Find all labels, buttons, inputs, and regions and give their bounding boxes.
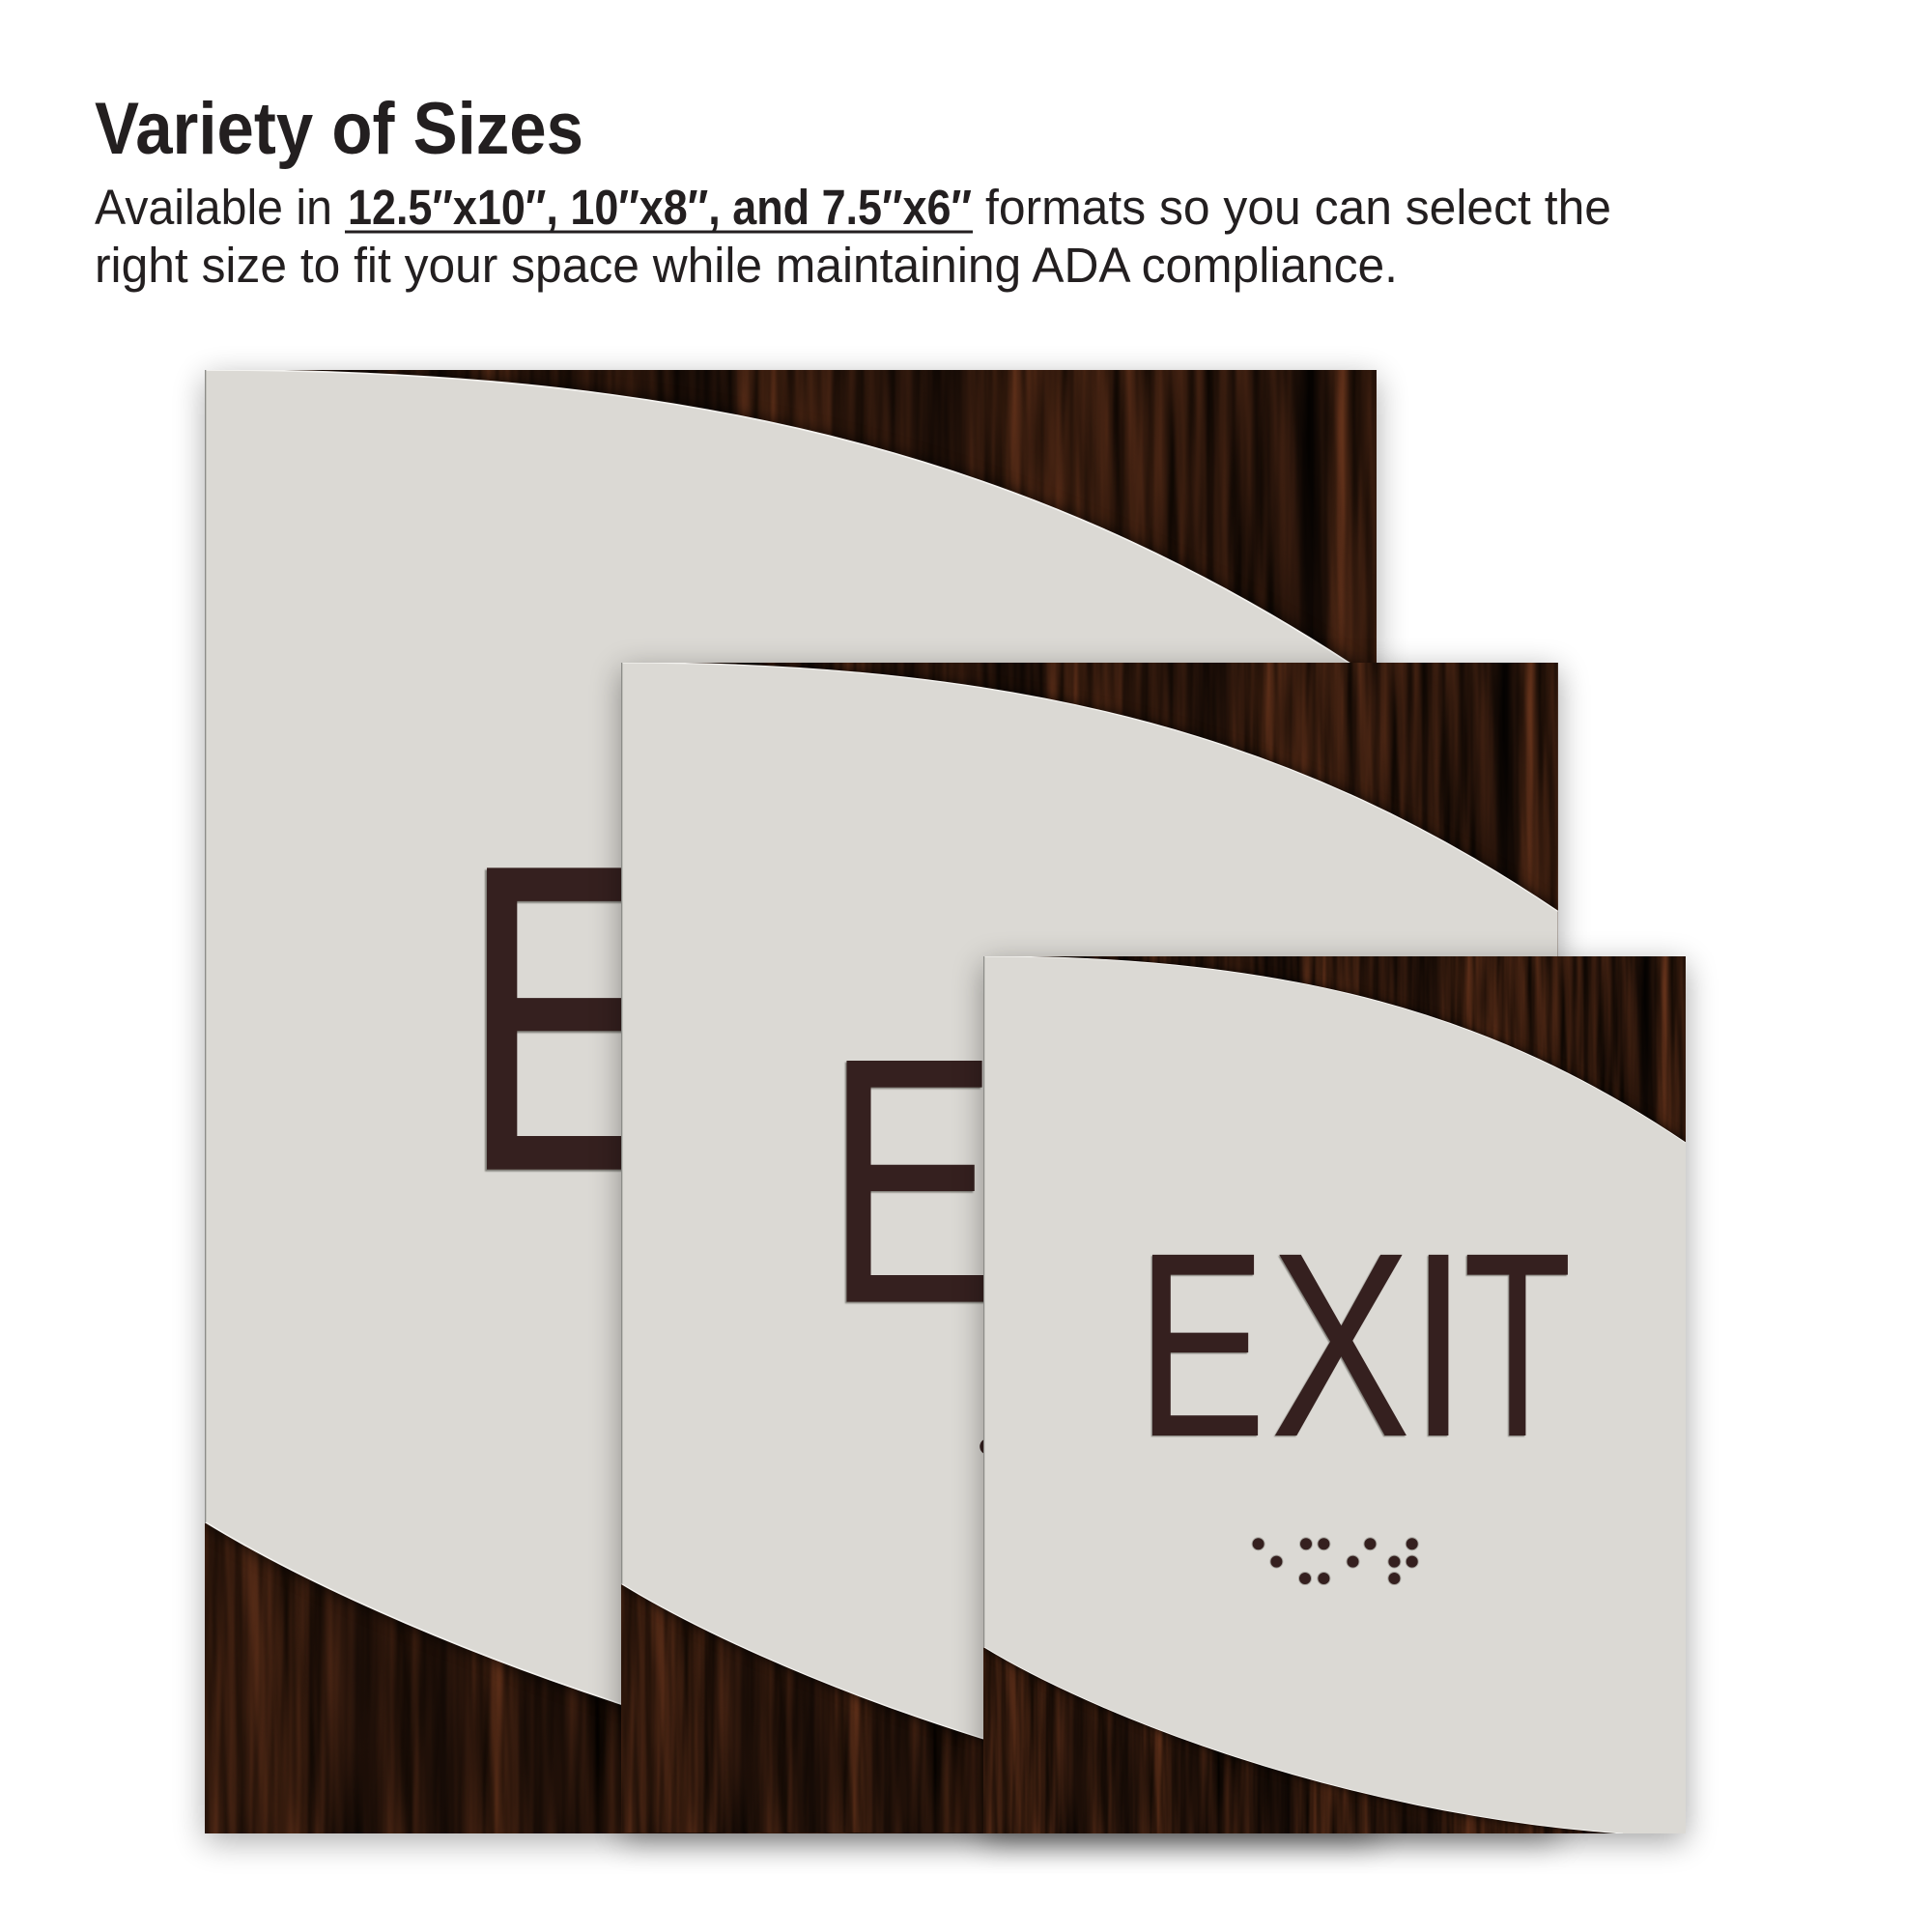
description text: 12.5″x10″, 10″x8″, and 7.5″x6″ [348, 180, 972, 235]
medium sign 10x8: X [1004, 984, 1191, 1377]
EXIT lettering: E [1136, 1197, 1266, 1492]
large sign 12.5x10: E [460, 773, 676, 1263]
EXIT lettering: X [1270, 1199, 1411, 1492]
description text [95, 180, 1611, 293]
medium sign 10x8: E [825, 984, 999, 1377]
large sign 12.5x10: I [915, 773, 1013, 1263]
description text: formats so you can select the [985, 180, 1611, 235]
small sign 7.5x6 [983, 956, 1686, 1841]
medium sign 10x8: I [1189, 984, 1267, 1377]
large sign 12.5x10: X [684, 774, 918, 1264]
description text: Available in [95, 180, 332, 235]
medium sign 10x8 [621, 663, 1558, 1840]
large sign 12.5x10: T [1006, 774, 1186, 1264]
EXIT lettering [1136, 1197, 1572, 1492]
EXIT lettering: T [1463, 1199, 1572, 1492]
medium sign 10x8: T [1262, 985, 1406, 1377]
large sign 12.5x10 [205, 370, 1377, 1841]
braille dots [1252, 1538, 1418, 1584]
description text: right size to fit your space while maintaining ADA compliance. [95, 238, 1398, 293]
EXIT lettering: I [1409, 1199, 1468, 1492]
title: Variety of Sizes [95, 88, 583, 170]
